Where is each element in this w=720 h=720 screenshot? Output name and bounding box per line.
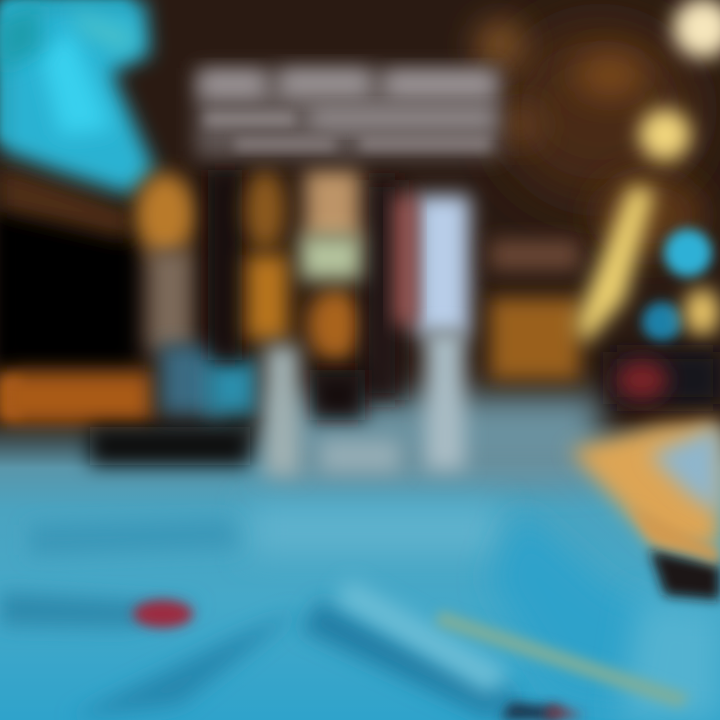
orange desk right (490, 240, 580, 380)
pencil bottom (500, 702, 585, 720)
top-left turquoise shape (0, 0, 155, 195)
red marker (133, 600, 193, 628)
book at right (570, 420, 720, 600)
dark table folds (0, 510, 720, 720)
orange columns (135, 170, 402, 420)
left dark panel (0, 168, 152, 424)
blue orbs and red object (610, 229, 720, 404)
table surface (0, 395, 720, 720)
colored central panels (265, 170, 470, 475)
background wall (0, 0, 720, 500)
ruler strip (435, 610, 690, 708)
blurred heading block (195, 68, 500, 158)
glowing yellow streak (575, 0, 720, 345)
